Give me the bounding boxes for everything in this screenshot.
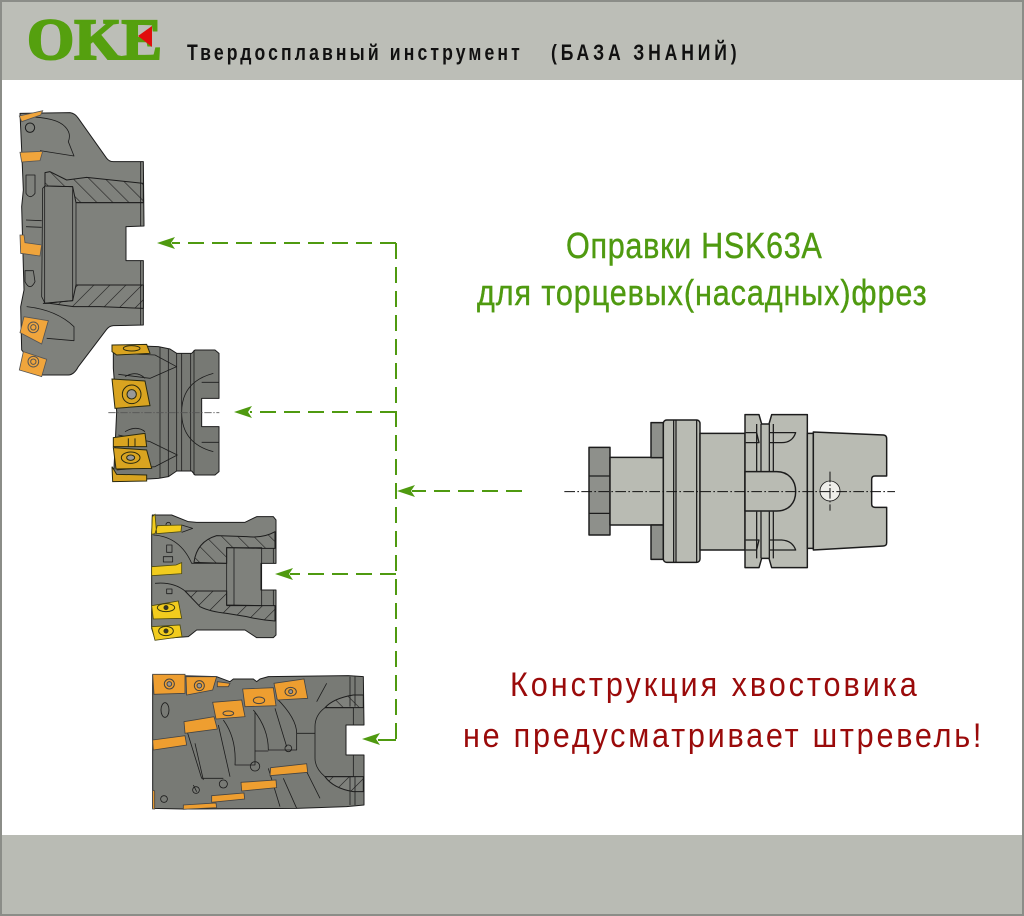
green heading: для торцевых(насадных)фрез [477,274,927,314]
arbor bore [42,186,73,303]
green heading [477,227,927,314]
body [700,433,745,550]
cutter 3: yellow insert mill [152,514,276,640]
flange [651,420,700,562]
carbide inserts [19,111,48,377]
hatched section, bottom [43,285,143,308]
hatched sections [325,695,363,708]
green heading: Оправки HSK63A [566,227,823,267]
neck [807,433,813,548]
centre lines [564,472,895,511]
centre line [108,411,219,414]
cutter 1: large face mill section [19,111,144,377]
orange inserts [153,674,308,809]
header title: (БАЗА ЗНАНИЙ) [551,39,737,66]
footer band [2,835,1022,914]
dashed connector lines [172,243,522,740]
header title: Твердосплавный инструмент [187,41,520,66]
access hole [820,481,840,501]
cutter 2: gold insert mill [108,344,219,482]
flutes [25,117,74,341]
hex nut [589,447,610,535]
gripper ring [745,415,807,568]
red note: не предусматривает штревель! [463,717,981,754]
red note: Конструкция хвостовика [510,666,917,703]
hatched section, top [45,172,143,203]
arrowheads [157,237,415,745]
HSK63A tool holder drawing [564,415,895,568]
hatched sections [194,532,275,563]
header title [187,39,737,66]
key slot [745,472,796,511]
red note [463,666,981,754]
header band [2,2,1022,80]
yellow inserts [152,514,182,640]
HSK taper [813,432,887,550]
gold inserts [112,344,152,482]
cutter 4: long edge mill [153,674,364,809]
arbor [153,522,273,606]
logo: OKE: OKE [27,7,162,72]
shaft [610,457,663,525]
